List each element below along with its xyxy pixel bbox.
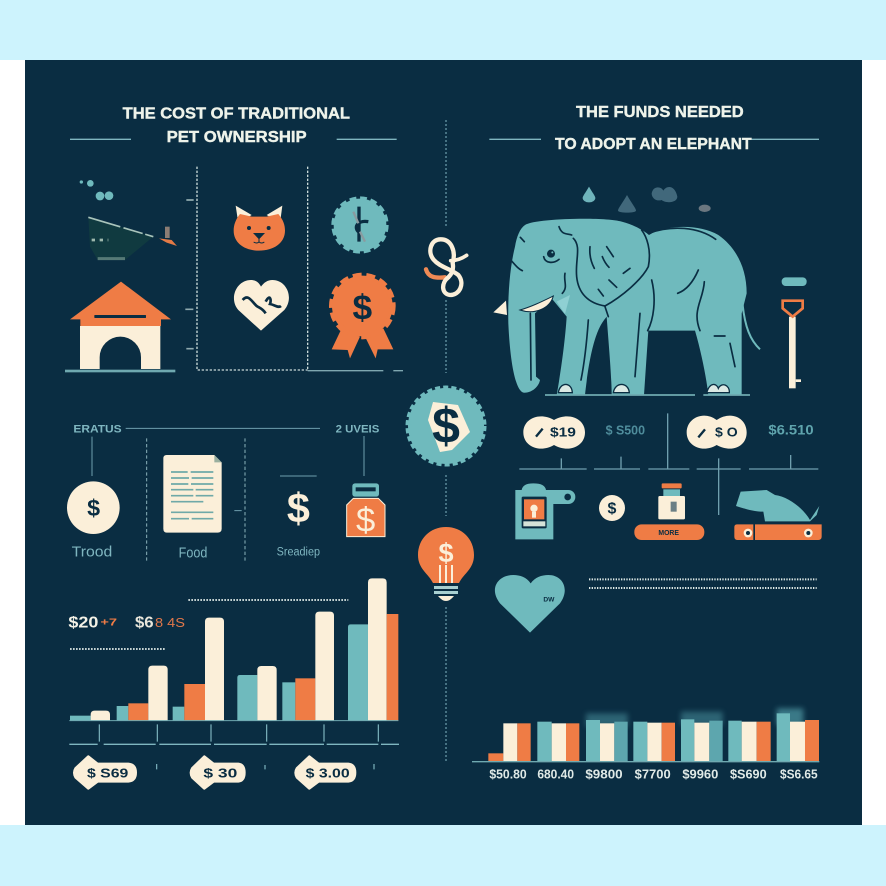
icon: water drops [583, 187, 711, 213]
icon: bottle and orange label [634, 483, 704, 540]
icon: teal heart [495, 575, 565, 633]
pill: $19 [523, 416, 585, 449]
title: funds needed to adopt an elephant: THE FUNDS NEEDED [576, 104, 744, 121]
pill: $3.00 [296, 757, 355, 788]
icon: light bulb with dollar [418, 527, 474, 601]
icon: dollar coin: $ [87, 495, 100, 521]
label: sreadiep: Sreadiep [277, 545, 320, 559]
icon: jar with dollar [347, 483, 385, 539]
icon: animal on orange bar [734, 490, 822, 540]
label: eratus: ERATUS [73, 423, 122, 435]
dotted rules [70, 600, 348, 649]
labels: bar values: $9800 [585, 768, 623, 782]
connector lines [519, 413, 818, 515]
icon: small coin [599, 495, 625, 521]
pill: $3.00: $ 3.00 [306, 766, 350, 780]
icon: cream heart [234, 280, 289, 331]
icon: jar with dollar: $ [356, 501, 375, 539]
pill: $19: $19 [550, 426, 576, 440]
labels: bar values: $50.80 [489, 768, 527, 782]
title: funds needed to adopt an elephant [489, 104, 819, 153]
icon: large teal dollar badge: $ [432, 398, 460, 454]
title: cost of traditional pet ownership [70, 105, 397, 146]
labels: bar values: $S6.65 [780, 768, 818, 782]
pill: $0 [687, 416, 747, 449]
bars [69, 578, 398, 721]
label: food: Food [179, 545, 207, 561]
icon: faded scene with dots [80, 180, 177, 260]
panel: elephant funds top [489, 104, 819, 395]
illustration: elephant [493, 219, 760, 395]
icon: document [163, 455, 222, 533]
icon: bottle and orange label: MORE [658, 528, 679, 537]
panel: right bar chart [472, 708, 819, 782]
label: 2 uveis: 2 UVEIS [336, 423, 380, 435]
labels: bar values: $9960 [682, 768, 718, 782]
labels: chart values: +7 [100, 618, 118, 629]
labels: chart values: $6 [135, 615, 154, 632]
icon: teal heart: DW [543, 596, 555, 603]
labels: bar values [489, 768, 818, 782]
dashed chart frame [185, 167, 403, 371]
centre dashed divider [445, 120, 447, 762]
pill: $569: $ S69 [87, 766, 128, 780]
icon: dollar coin [67, 481, 120, 534]
pill: $30: $ 30 [203, 766, 237, 780]
icon: teal device [515, 483, 575, 539]
icon: cat face [234, 206, 285, 251]
label: trood: Trood [72, 545, 112, 561]
labels: chart values [68, 615, 185, 632]
icon: orange award badge [332, 276, 393, 358]
bars [472, 708, 819, 762]
icon: light bulb with dollar: $ [438, 538, 454, 568]
panel: elephant cost items [495, 413, 822, 633]
labels: bar values: $S690 [730, 768, 767, 782]
pill: $0: $ O [715, 426, 738, 440]
icon: central ampersand squiggle [426, 239, 467, 295]
connector lines [92, 428, 364, 562]
labels: chart values: $20 [68, 615, 98, 632]
icon: small coin: $ [608, 501, 617, 518]
labels: chart values: 8 4S [155, 616, 185, 630]
pill: $569 [74, 757, 136, 788]
icon: dog house [65, 282, 175, 372]
label: $6.510: $6.510 [768, 422, 814, 438]
pill: $30 [191, 757, 244, 788]
icon: shovel [782, 277, 807, 388]
labels: bar values: 680.40 [537, 768, 574, 782]
labels: bar values: $7700 [635, 768, 671, 782]
axis and ticks [69, 724, 399, 769]
panel: pet cost categories [67, 423, 385, 562]
icon: orange award badge: $ [353, 288, 373, 327]
icon: large teal dollar badge [408, 388, 484, 464]
panel: traditional pet ownership top [65, 105, 403, 372]
title: funds needed to adopt an elephant: TO ADOPT AN ELEPHANT [555, 136, 752, 153]
title: cost of traditional pet ownership: PET OWNERSHIP [167, 129, 307, 146]
icon: dollar sign: $ [287, 486, 310, 532]
label: $3500: $ S500 [606, 424, 645, 438]
title: cost of traditional pet ownership: THE COST OF TRADITIONAL [123, 105, 350, 122]
icon: teal badge [334, 199, 386, 251]
panel: left bar chart [68, 578, 399, 788]
dotted text lines [589, 579, 817, 588]
